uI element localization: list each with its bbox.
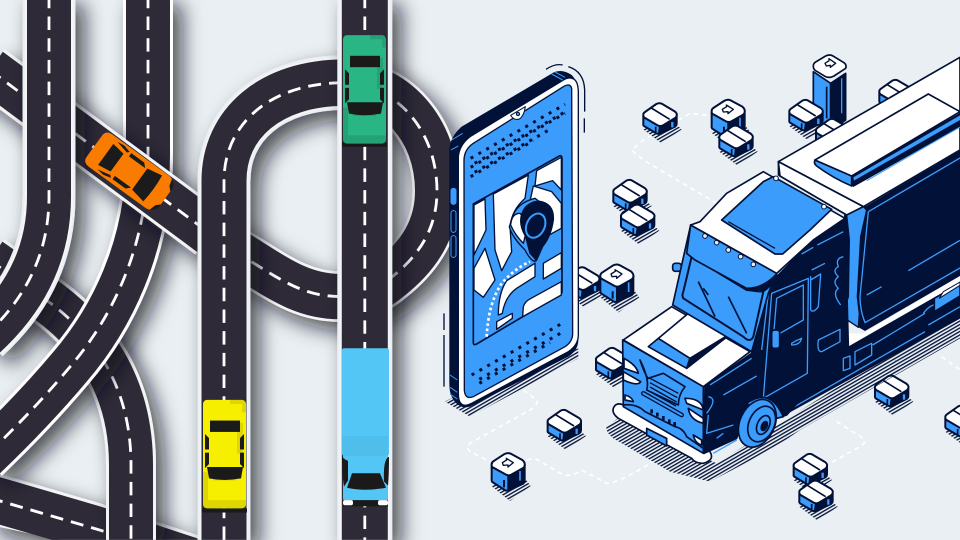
phone group [444,65,585,417]
phone frame [458,78,578,405]
windshield frame [673,225,777,352]
chassis floor [844,276,960,349]
map pin [509,198,554,262]
wheel [731,393,784,453]
phone shadow [445,348,578,417]
phone body [449,71,578,407]
wipers [698,282,747,333]
visor [687,225,777,291]
map blocks [474,157,561,329]
isometric scene [444,55,960,521]
dot rows top [471,104,565,177]
road: first vertical curving left [0,0,49,336]
car: orange [83,130,177,214]
trailer white band [778,162,863,215]
car: green [342,35,387,147]
boxes beside phone [565,264,639,388]
car: yellow [202,400,247,513]
trailer side navy [842,152,960,330]
hood [623,307,750,387]
road: S-curve down to bottom [0,260,131,540]
road: loop [215,83,437,297]
cab side details [707,232,843,453]
tall box [813,55,846,132]
hood scoop [648,313,729,368]
cab roof [691,172,845,273]
boxes lower [491,376,960,521]
visor lights [703,234,756,267]
front face [623,340,703,453]
cab side [704,220,848,453]
phone screen [464,85,573,397]
dot rows bottom [472,322,565,383]
notch [511,107,525,119]
box group upper [612,100,758,245]
left mirror [673,263,681,271]
road: lower-left diagonal [0,471,212,540]
boxes behind truck [788,80,918,159]
road: main vertical [337,0,392,540]
trailer front strip [778,163,867,327]
chassis lines [777,313,925,408]
trailer dashes [867,240,960,295]
phone motion arcs [444,65,585,387]
fuel tank [923,290,960,325]
road: diagonal with orange car [0,70,210,234]
chassis [767,279,960,416]
sunroof [722,177,832,254]
truck: light blue [342,348,389,506]
vehicles on vertical roads [202,35,389,513]
route [487,262,530,337]
roof pod [814,94,960,186]
mirror [772,330,780,348]
windshield glass [682,257,763,340]
road: second vertical curving lower-left [0,0,148,457]
road: vertical into arc [224,83,345,540]
side buttons [450,72,565,399]
trailer side outline [860,158,960,323]
truck group [606,57,960,482]
map panel [473,156,562,345]
trailer top [778,57,960,207]
grille and lights [623,358,703,448]
delivery route dashes [467,113,960,483]
truck shadow [606,310,960,482]
roads [0,0,437,540]
base bumper [613,404,711,463]
